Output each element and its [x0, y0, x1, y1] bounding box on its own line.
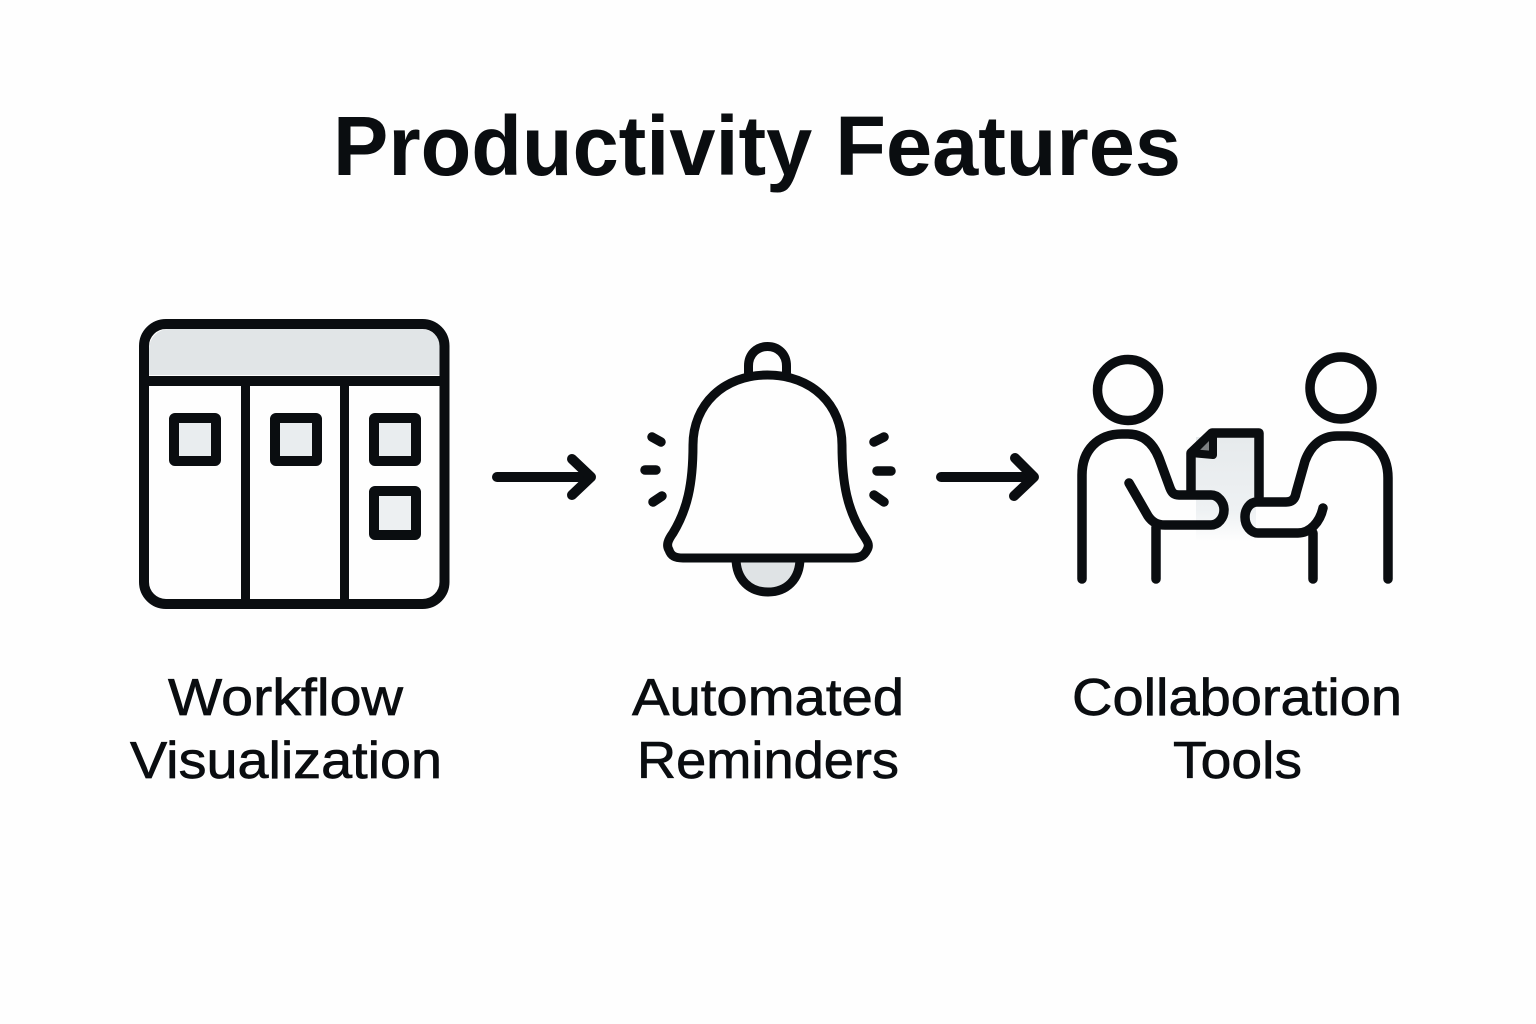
right person head — [1310, 357, 1372, 419]
bell body — [668, 375, 868, 558]
card column 1 — [174, 418, 216, 461]
label: collaboration tools — [1072, 669, 1402, 790]
bell ringing marks — [645, 437, 891, 502]
arrow: reminders to collaboration — [941, 458, 1034, 496]
icon: workflow board — [144, 324, 444, 604]
document shading — [1196, 437, 1256, 542]
left person head — [1098, 360, 1158, 420]
label: collaboration tools: Collaboration — [1072, 669, 1402, 727]
label: workflow visualization: Visualization — [130, 732, 442, 790]
card column 2 — [275, 418, 317, 461]
right person body — [1245, 436, 1388, 579]
bell clapper — [736, 558, 800, 592]
document outline — [1191, 433, 1259, 497]
label: workflow visualization: Workflow — [168, 669, 403, 727]
icon: two people sharing a document — [1082, 357, 1388, 579]
label: automated reminders — [632, 669, 904, 790]
card column 3 top — [374, 418, 416, 461]
label: automated reminders: Automated — [632, 669, 904, 727]
board header bar — [149, 329, 441, 375]
arrow: workflow to reminders — [497, 459, 591, 495]
board header divider — [144, 376, 444, 386]
title: Productivity Features — [333, 99, 1181, 193]
label: workflow visualization — [130, 669, 442, 790]
board column dividers — [246, 381, 344, 604]
document fold — [1191, 437, 1213, 455]
icon: bell — [645, 346, 891, 592]
card column 3 bottom — [374, 491, 416, 535]
label: collaboration tools: Tools — [1173, 732, 1302, 790]
board frame — [144, 324, 444, 604]
bell handle — [748, 346, 786, 373]
label: automated reminders: Reminders — [637, 732, 899, 790]
left person body — [1082, 434, 1224, 579]
